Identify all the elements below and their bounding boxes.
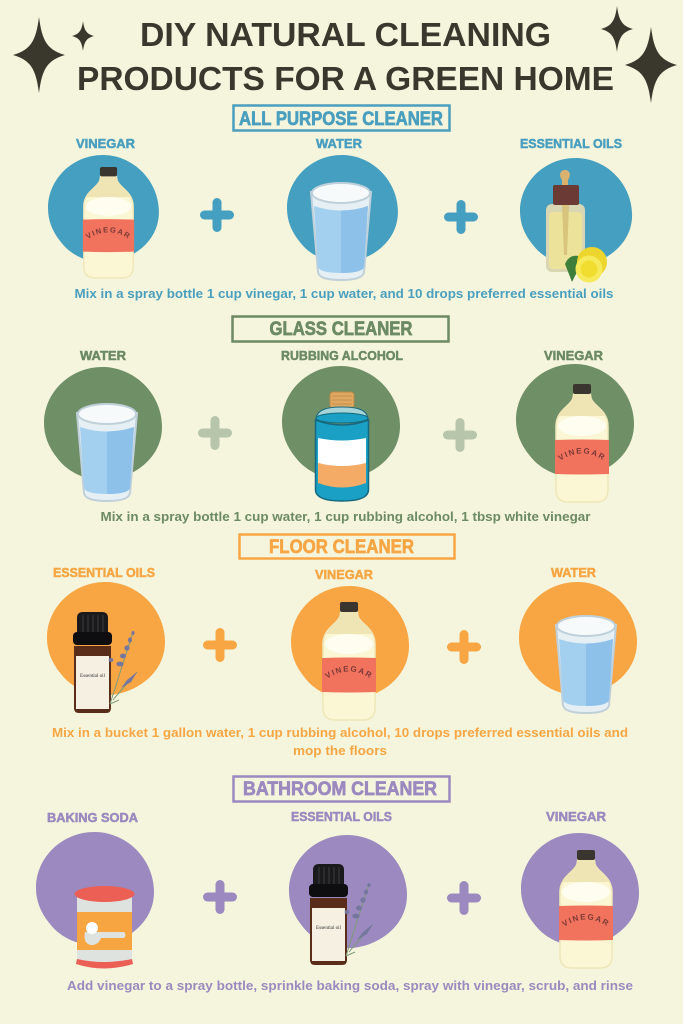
- icon: essential oil bottle with lavender: Essential oil: [316, 925, 341, 931]
- label: vinegar: VINEGAR: [546, 810, 606, 824]
- description: Mix in a spray bottle 1 cup vinegar, 1 cup water, and 10 drops preferred essential oils: [74, 287, 614, 301]
- description: Mix in a spray bottle 1 cup water, 1 cup rubbing alcohol, 1 tbsp white vinegar: [100, 510, 591, 524]
- plus: [203, 880, 237, 914]
- icon: baking soda can: [36, 832, 154, 968]
- panel: bathroom cleaner: [36, 775, 639, 993]
- label: vinegar: VINEGAR: [76, 137, 135, 151]
- icon: water glass: [519, 582, 637, 713]
- plus: [447, 630, 481, 664]
- icon: water glass: [287, 155, 398, 280]
- icon: small star left: [72, 21, 94, 51]
- plus: [447, 881, 481, 915]
- icon: large star left: [13, 17, 65, 93]
- plus: [443, 418, 477, 452]
- title: PRODUCTS FOR A GREEN HOME: [77, 60, 614, 97]
- icon: vinegar bottle: VINEGAR: [85, 227, 130, 238]
- icon: water glass: [44, 367, 162, 501]
- icon: vinegar bottle: [291, 586, 409, 721]
- heading: glass cleaner: GLASS CLEANER: [270, 319, 413, 340]
- plus: [200, 198, 234, 232]
- label: baking soda: BAKING SODA: [47, 811, 138, 825]
- title: [77, 16, 614, 97]
- label: rubbing alcohol: RUBBING ALCOHOL: [281, 349, 403, 363]
- plus: [198, 416, 232, 450]
- label: water: WATER: [80, 349, 126, 363]
- icon: large star right: [625, 27, 677, 103]
- label: essential oils: ESSENTIAL OILS: [291, 810, 392, 824]
- heading: bathroom cleaner: BATHROOM CLEANER: [243, 779, 437, 800]
- plus: [444, 200, 478, 234]
- icon: vinegar bottle: [516, 364, 634, 503]
- description: [52, 726, 628, 758]
- heading: floor cleaner: [240, 534, 454, 558]
- label: vinegar: VINEGAR: [315, 568, 373, 582]
- plus: [203, 628, 237, 662]
- description: Mix in a bucket 1 gallon water, 1 cup rubbing alcohol, 10 drops preferred essential oils and: [52, 726, 628, 740]
- icon: essential oil bottle with lavender: Essential oil: [80, 673, 105, 679]
- heading: glass cleaner: [232, 316, 448, 342]
- icon: vinegar bottle: [521, 833, 639, 969]
- icon: essential oil bottle with lavender: [289, 835, 407, 965]
- icon: vinegar bottle: VINEGAR: [558, 448, 604, 460]
- panel: glass cleaner: [44, 315, 634, 524]
- icon: essential oil bottle with lavender: [47, 582, 165, 713]
- label: essential oils: ESSENTIAL OILS: [520, 137, 622, 151]
- icon: vinegar bottle: VINEGAR: [562, 914, 608, 926]
- panel: floor cleaner: [47, 533, 637, 758]
- label: essential oils: ESSENTIAL OILS: [53, 566, 155, 580]
- label: vinegar: VINEGAR: [544, 349, 603, 363]
- icon: vinegar bottle: VINEGAR: [324, 666, 372, 678]
- heading: all purpose cleaner: ALL PURPOSE CLEANER: [239, 109, 443, 130]
- label: water: WATER: [551, 566, 596, 580]
- heading: floor cleaner: FLOOR CLEANER: [269, 537, 414, 558]
- label: water: WATER: [316, 137, 362, 151]
- icon: vinegar bottle: [48, 155, 159, 279]
- description: Add vinegar to a spray bottle, sprinkle baking soda, spray with vinegar, scrub, and rinse: [67, 979, 633, 993]
- icon: essential oil dropper and lemon: [520, 158, 632, 282]
- icon: rubbing alcohol bottle: [282, 366, 400, 501]
- description: mop the floors: [293, 744, 387, 758]
- panel: all purpose cleaner: [48, 104, 632, 301]
- icon: small star right: [601, 6, 633, 52]
- title: DIY NATURAL CLEANING: [140, 16, 551, 53]
